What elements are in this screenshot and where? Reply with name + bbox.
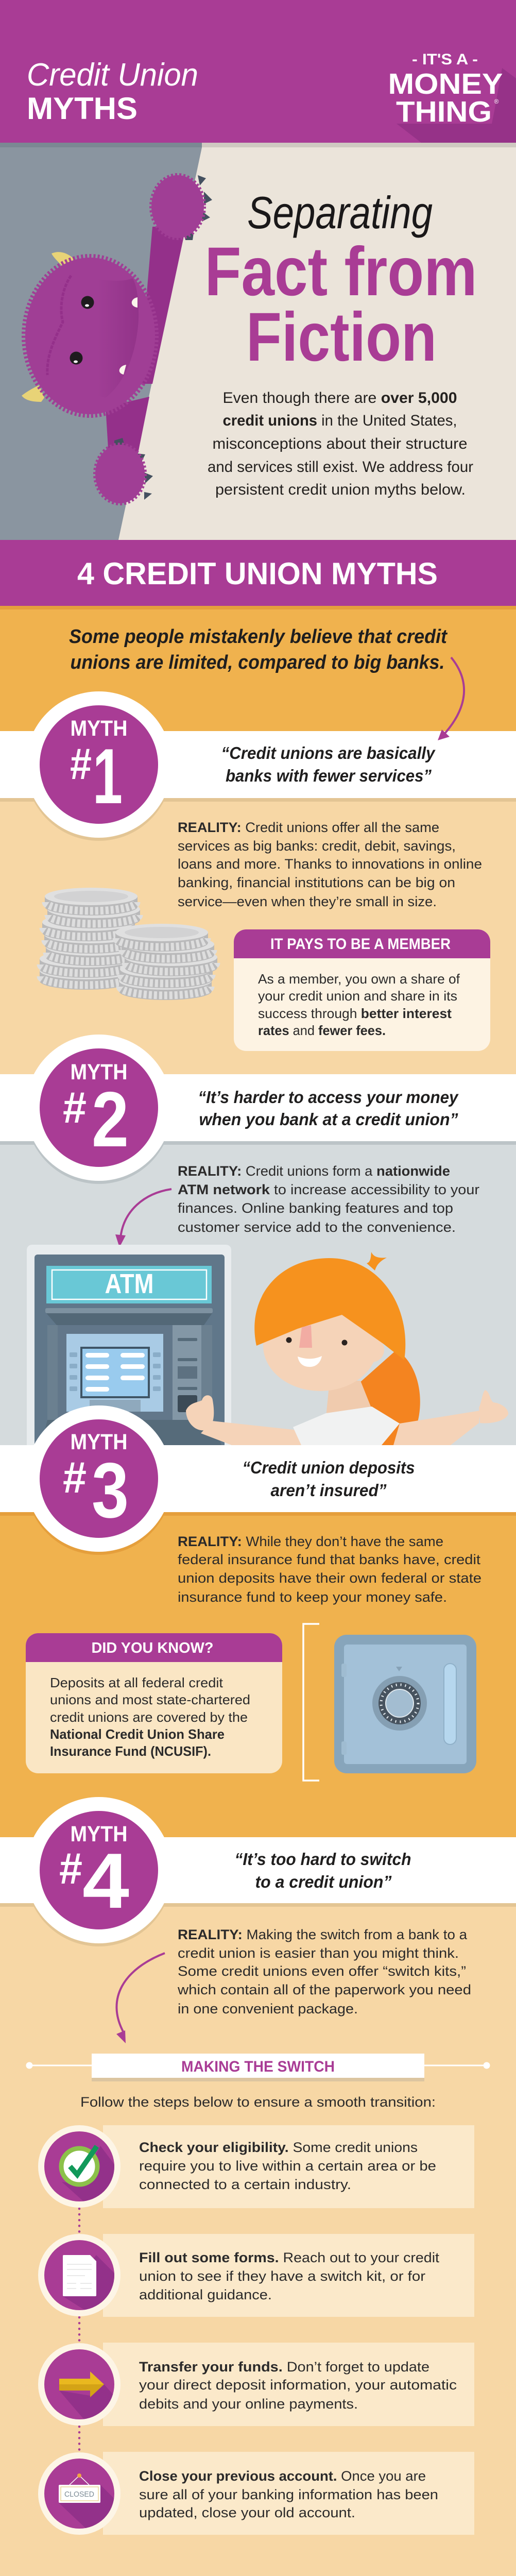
- step 3: transfer funds: [38, 2343, 474, 2427]
- myth 3 reality text: union deposits have their own federal or state: [178, 1570, 481, 1586]
- myth 2 band: [0, 1035, 516, 1184]
- myth 1 reality text: services as big banks: credit, debit, savings,: [178, 838, 456, 854]
- teeth: [132, 297, 137, 308]
- hero title: [205, 187, 477, 376]
- face: [263, 1300, 377, 1391]
- paws: [151, 175, 204, 238]
- callout: it pays to be a member: IT PAYS TO BE A MEMBER: [270, 936, 451, 953]
- callout: it pays to be a member: rates and fewer fees.: [258, 1023, 386, 1038]
- intro statement: unions are limited, compared to big banks.: [70, 652, 445, 673]
- ATM illustration: [27, 1245, 231, 1445]
- hair and bangs: [254, 1258, 405, 1360]
- icon: safe: [303, 1624, 476, 1781]
- myth 2 badge: #: [63, 1083, 87, 1132]
- myth 1 reality text: REALITY: Credit unions offer all the same: [178, 820, 439, 835]
- myth 4 reality text: [177, 1927, 471, 2016]
- icon: coin stacks: [40, 888, 217, 1000]
- arms and hands: [186, 1390, 508, 1445]
- logo: It's a Money Thing: [388, 51, 516, 143]
- myth 2 reality text: ATM network to increase accessibility to your: [178, 1182, 479, 1197]
- intro statement: Some people mistakenly believe that credit: [69, 626, 448, 648]
- myth 1 band: [0, 691, 516, 841]
- myth 3 quote: aren’t insured”: [271, 1481, 387, 1500]
- header title: [27, 57, 198, 126]
- myth 1 quote: banks with fewer services”: [226, 766, 432, 785]
- step 4: close account: updated, close your old account.: [139, 2505, 355, 2520]
- header title: Credit Union: [27, 57, 198, 93]
- arrow to making the switch: [116, 1953, 165, 2043]
- icon: arrow: [59, 2371, 104, 2397]
- woman illustration: [186, 1252, 508, 1445]
- callout: did you know: [26, 1633, 282, 1773]
- myth 1 quote: “Credit unions are basically: [221, 743, 436, 762]
- myth 2 quote: “It’s harder to access your money: [198, 1088, 459, 1107]
- myth 3 quote: “Credit union deposits: [242, 1458, 415, 1477]
- step 2: fill out forms: [38, 2234, 474, 2318]
- ATM sign: [46, 1266, 212, 1303]
- lower arm: [106, 397, 149, 453]
- hero title: Separating: [247, 187, 433, 238]
- eyes: [286, 1337, 291, 1343]
- header title: MYTHS: [27, 91, 137, 126]
- myth 3 band: [0, 1405, 516, 1555]
- myth 2 badge: [40, 1048, 158, 1167]
- logo: It's a Money Thing: THING: [396, 95, 492, 128]
- myth 2 reality text: REALITY: Credit unions form a nationwide: [178, 1163, 450, 1179]
- myth 1 reality text: banking, financial institutions can be big on: [178, 875, 455, 890]
- myth 1 reality text: loans and more. Thanks to innovations in online: [178, 856, 482, 872]
- hero gray panel: [0, 143, 203, 540]
- myth 3 reality text: [178, 1534, 481, 1605]
- step 1: check eligibility: Check your eligibility. Some credit unions: [139, 2140, 418, 2155]
- hero title: Fiction: [246, 299, 437, 376]
- intro statement: [69, 626, 448, 673]
- myth 4 reality text: credit union is easier than you might think.: [178, 1945, 459, 1961]
- hero intro text: persistent credit union myths below.: [215, 481, 466, 498]
- myth 3 quote: [242, 1458, 415, 1500]
- myth 1 badge: 1: [93, 733, 123, 820]
- myth 1 badge: #: [70, 740, 92, 789]
- myth 3 reality text: insurance fund to keep your money safe.: [178, 1589, 447, 1605]
- monster illustration: [22, 175, 212, 504]
- upper arm: [139, 227, 186, 384]
- myth 1 reality text: service—even when they’re small in size.: [178, 894, 437, 909]
- ponytail: [335, 1350, 420, 1445]
- hero intro text: misconceptions about their structure: [212, 435, 468, 452]
- callout: did you know: credit unions are covered by the: [50, 1709, 248, 1725]
- logo: It's a Money Thing: MONEY: [388, 67, 503, 100]
- shirt: [293, 1406, 400, 1445]
- hero intro text: [208, 389, 473, 498]
- ATM sign: ATM: [105, 1268, 153, 1299]
- hero intro text: credit unions in the United States,: [222, 412, 457, 429]
- horns: [51, 252, 74, 269]
- myth 3 badge: MYTH: [70, 1430, 128, 1454]
- smile: [298, 1356, 322, 1367]
- step 2: fill out forms: additional guidance.: [139, 2287, 272, 2302]
- hero title: Fact from: [205, 233, 477, 310]
- myth 2 badge: MYTH: [70, 1060, 128, 1084]
- section heading band: [0, 540, 516, 609]
- step 4: close account: [38, 2452, 474, 2535]
- fur seam: [47, 276, 71, 375]
- logo: It's a Money Thing: ®: [494, 98, 499, 105]
- header band: [0, 0, 516, 143]
- myth 4 reality text: which contain all of the paperwork you need: [177, 1982, 471, 1997]
- myth 2 reality text: finances. Online banking features and top: [178, 1200, 453, 1216]
- callout: did you know: Insurance Fund (NCUSIF).: [50, 1743, 211, 1759]
- myth 2 reality text: [178, 1163, 479, 1235]
- myth 4 badge: MYTH: [70, 1822, 128, 1846]
- icon: closed sign: CLOSED: [64, 2490, 94, 2499]
- callout: did you know: National Credit Union Share: [50, 1726, 225, 1742]
- arrow to ATM: [115, 1189, 171, 1247]
- callout: did you know: unions and most state-chartered: [50, 1692, 250, 1707]
- myth 2 badge: 2: [92, 1076, 129, 1163]
- icon: closed sign: [59, 2473, 100, 2503]
- ATM screen: [66, 1334, 163, 1412]
- logo: It's a Money Thing: - IT'S A -: [412, 51, 478, 68]
- myth 2 reality text: customer service add to the convenience.: [178, 1219, 456, 1235]
- callout: did you know: DID YOU KNOW?: [92, 1640, 213, 1656]
- step 4: close account: Close your previous account. Once you are: [139, 2468, 426, 2484]
- step 1: check eligibility: require you to live within a certain area or be: [139, 2158, 436, 2174]
- arrow to myth 1: [438, 657, 464, 740]
- icon: document: [63, 2255, 96, 2296]
- step 1: check eligibility: connected to a certain industry.: [139, 2177, 351, 2192]
- neck: [326, 1381, 372, 1417]
- head with fur: [25, 258, 155, 414]
- myth 3 reality text: federal insurance fund that banks have, credit: [178, 1552, 481, 1567]
- cowlick: [367, 1252, 387, 1270]
- myth 4 quote: [235, 1850, 411, 1891]
- making the switch heading: MAKING THE SWITCH: [181, 2058, 335, 2075]
- myth 4 quote: “It’s too hard to switch: [235, 1850, 411, 1869]
- step 4: close account: sure all of your banking information has been: [139, 2487, 438, 2502]
- face: [47, 278, 139, 398]
- callout: it pays to be a member: success through better interest: [258, 1006, 452, 1021]
- hero intro text: Even though there are over 5,000: [222, 389, 457, 406]
- myth 1 badge: [40, 705, 158, 824]
- step 2: fill out forms: union to see if they have a switch kit, or for: [139, 2268, 425, 2284]
- myth 4 badge: #: [59, 1844, 82, 1893]
- step 2: fill out forms: Fill out some forms. Reach out to your credit: [139, 2250, 440, 2265]
- icon: check mark: [61, 2146, 97, 2184]
- myth 4 quote: to a credit union”: [255, 1872, 392, 1891]
- step 3: transfer funds: debits and your online payments.: [139, 2396, 358, 2412]
- myth 3 badge: 3: [92, 1447, 129, 1534]
- hero intro text: and services still exist. We address four: [208, 459, 473, 476]
- myth 1 quote: [221, 743, 436, 785]
- myth 1 reality text: [178, 820, 482, 909]
- myth 4 badge: [40, 1811, 158, 1929]
- myth 3 badge: [40, 1419, 158, 1538]
- eyes: [81, 296, 94, 309]
- callout: did you know: Deposits at all federal credit: [50, 1675, 223, 1690]
- myth 2 quote: when you bank at a credit union”: [199, 1110, 458, 1129]
- ATM side panel: [173, 1325, 201, 1420]
- callout: it pays to be a member: [234, 929, 490, 1051]
- step 3: transfer funds: Transfer your funds. Don’t forget to update: [139, 2359, 429, 2375]
- myth 4 reality text: REALITY: Making the switch from a bank to a: [178, 1927, 468, 1942]
- myth 4 reality text: in one convenient package.: [178, 2001, 358, 2016]
- hero shadow strip: [0, 143, 516, 147]
- step 1: check eligibility: [38, 2125, 474, 2208]
- myth 4 reality text: Some credit unions even offer “switch kits,”: [178, 1963, 466, 1979]
- callout: it pays to be a member: As a member, you own a share of: [258, 971, 460, 987]
- myth 4 band: [0, 1797, 516, 1946]
- claws: [114, 175, 212, 500]
- steps intro: Follow the steps below to ensure a smooth transition:: [80, 2094, 436, 2110]
- nose: [299, 1325, 312, 1348]
- section heading band: 4 CREDIT UNION MYTHS: [77, 556, 438, 591]
- myth 3 badge: #: [63, 1453, 87, 1502]
- myth 4 badge: 4: [82, 1837, 129, 1925]
- making the switch heading: [26, 2054, 490, 2081]
- myth 1 badge: MYTH: [70, 716, 128, 741]
- dotted connectors: [78, 2209, 80, 2450]
- myth 2 quote: [198, 1088, 459, 1129]
- myth 3 reality text: REALITY: While they don’t have the same: [178, 1534, 443, 1549]
- step 3: transfer funds: your direct deposit information, your automatic: [139, 2377, 457, 2393]
- callout: it pays to be a member: your credit union and share in its: [258, 988, 457, 1004]
